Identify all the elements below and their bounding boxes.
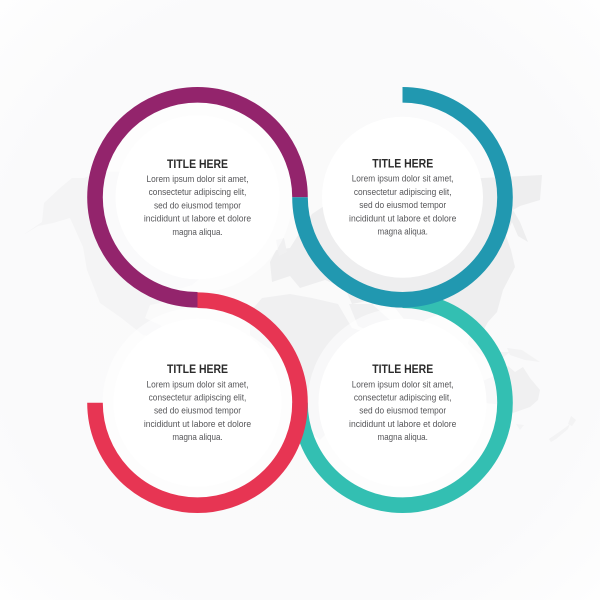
- body: top-left: [144, 174, 251, 237]
- panel: top-right disc: [322, 117, 483, 278]
- map: North America: [23, 170, 222, 338]
- body: bottom-right: consectetur adipiscing elit,: [354, 392, 452, 402]
- body: bottom-right: magna aliqua.: [378, 432, 428, 442]
- map: Eurasia: [270, 175, 542, 340]
- body: top-right: incididunt ut labore et dolore: [349, 213, 456, 223]
- body: top-left: magna aliqua.: [172, 227, 223, 237]
- heading: bottom-left: TITLE HERE: [167, 362, 228, 376]
- map: British Isles: [276, 238, 287, 256]
- body: top-right: magna aliqua.: [378, 226, 428, 236]
- body: bottom-left: [144, 379, 251, 442]
- arc: purple: [95, 95, 300, 300]
- text block: top-right: [349, 156, 456, 236]
- heading: bottom-right: TITLE HERE: [372, 362, 433, 376]
- map: New Guinea: [507, 348, 540, 362]
- body: bottom-right: [349, 379, 456, 442]
- body: bottom-left: magna aliqua.: [172, 432, 223, 442]
- map: South America: [160, 338, 240, 475]
- body: bottom-right: incididunt ut labore et dolore: [349, 419, 456, 429]
- body: bottom-left: Lorem ipsum dolor sit amet,: [146, 379, 248, 389]
- heading: top-right: TITLE HERE: [372, 156, 433, 170]
- body: top-left: sed do eiusmod tempor: [154, 200, 241, 210]
- white rings over the map: [102, 102, 498, 498]
- body: bottom-left: consectetur adipiscing elit,: [149, 392, 246, 402]
- body: bottom-left: sed do eiusmod tempor: [154, 406, 241, 416]
- text block: top-left: [144, 157, 251, 237]
- map: Australia: [480, 366, 540, 413]
- body: bottom-right: sed do eiusmod tempor: [359, 406, 446, 416]
- body: bottom-left: incididunt ut labore et dolore: [144, 419, 251, 429]
- body: top-left: consectetur adipiscing elit,: [149, 187, 246, 197]
- map: Tasmania: [516, 424, 524, 430]
- panel: bottom-right disc: [318, 319, 486, 487]
- body: bottom-right: Lorem ipsum dolor sit amet,: [352, 379, 454, 389]
- body: top-right: Lorem ipsum dolor sit amet,: [352, 174, 454, 184]
- map: New Zealand: [549, 416, 576, 442]
- body: top-right: sed do eiusmod tempor: [359, 200, 446, 210]
- heading: top-left: TITLE HERE: [167, 157, 228, 171]
- map: Indonesia: [468, 332, 510, 360]
- text block: bottom-right: [349, 362, 456, 442]
- text block: bottom-left: [144, 362, 251, 442]
- arc: teal: [300, 95, 505, 300]
- map: Arabia: [349, 304, 392, 332]
- body: top-right: consectetur adipiscing elit,: [354, 187, 452, 197]
- arc: red: [95, 300, 300, 505]
- panel: bottom-left disc: [114, 319, 282, 487]
- world map: [23, 170, 576, 475]
- map: Africa: [250, 294, 372, 440]
- body: top-left: Lorem ipsum dolor sit amet,: [146, 174, 248, 184]
- body: top-left: incididunt ut labore et dolore: [144, 214, 251, 224]
- arc: green: [300, 300, 505, 505]
- panel: top-left disc: [116, 115, 280, 279]
- body: top-right: [349, 174, 456, 236]
